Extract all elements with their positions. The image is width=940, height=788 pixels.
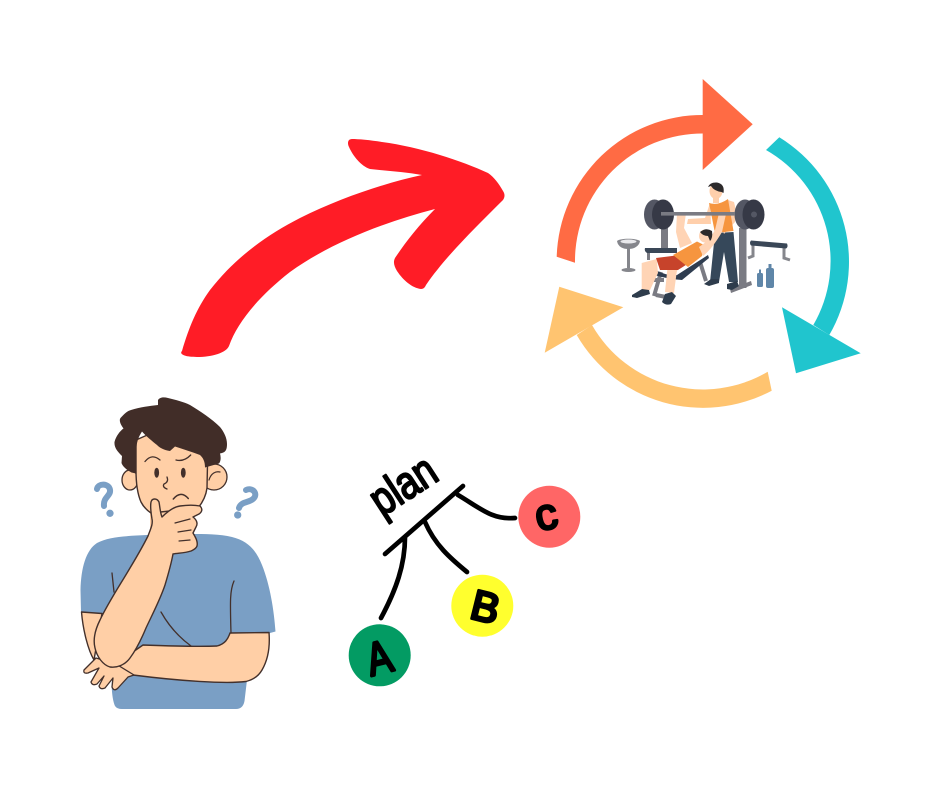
branching lines bbox=[381, 486, 515, 618]
node: C circle bbox=[518, 486, 580, 548]
arrow: yellow cycle segment bbox=[545, 287, 772, 408]
icon: water bottles bbox=[757, 264, 774, 288]
label: A: A bbox=[361, 629, 397, 686]
cycle diagram bbox=[545, 79, 861, 408]
icon: flat bench bbox=[748, 240, 790, 260]
arrow: large red curved arrow bbox=[181, 139, 504, 357]
icon: lifter bbox=[632, 213, 726, 305]
right arm bbox=[110, 632, 269, 682]
label: plan: plan bbox=[359, 444, 446, 525]
face bbox=[136, 425, 208, 513]
face details bbox=[145, 455, 191, 499]
icon: barbell bbox=[644, 200, 764, 230]
node: B circle bbox=[451, 575, 513, 637]
character: thinking man bbox=[80, 397, 276, 709]
label: C: c bbox=[530, 489, 562, 541]
plan decision tree bbox=[349, 444, 580, 686]
sleeve fold and shirt lines bbox=[112, 573, 234, 646]
left upper arm bbox=[82, 612, 102, 660]
icon: barbell uprights bbox=[647, 228, 752, 293]
shirt bbox=[80, 534, 276, 709]
icon: left question mark bbox=[97, 485, 112, 516]
left ear bbox=[122, 470, 138, 490]
forearm and hand bbox=[94, 499, 202, 667]
arrow: orange cycle segment bbox=[557, 79, 753, 263]
icon: gym bench press scene bbox=[617, 182, 790, 305]
hair bbox=[114, 397, 227, 474]
icon: bench seat and frame bbox=[645, 248, 709, 297]
icon: weight stand bowl bbox=[617, 239, 640, 272]
right ear bbox=[201, 464, 227, 490]
icon: right question mark bbox=[235, 489, 255, 517]
node: A circle bbox=[349, 624, 411, 686]
fingers bbox=[84, 658, 134, 690]
neck bbox=[150, 505, 190, 536]
icon: trainer bbox=[687, 182, 739, 290]
arrow: teal cycle segment bbox=[766, 137, 861, 373]
label: B: B bbox=[466, 581, 505, 633]
